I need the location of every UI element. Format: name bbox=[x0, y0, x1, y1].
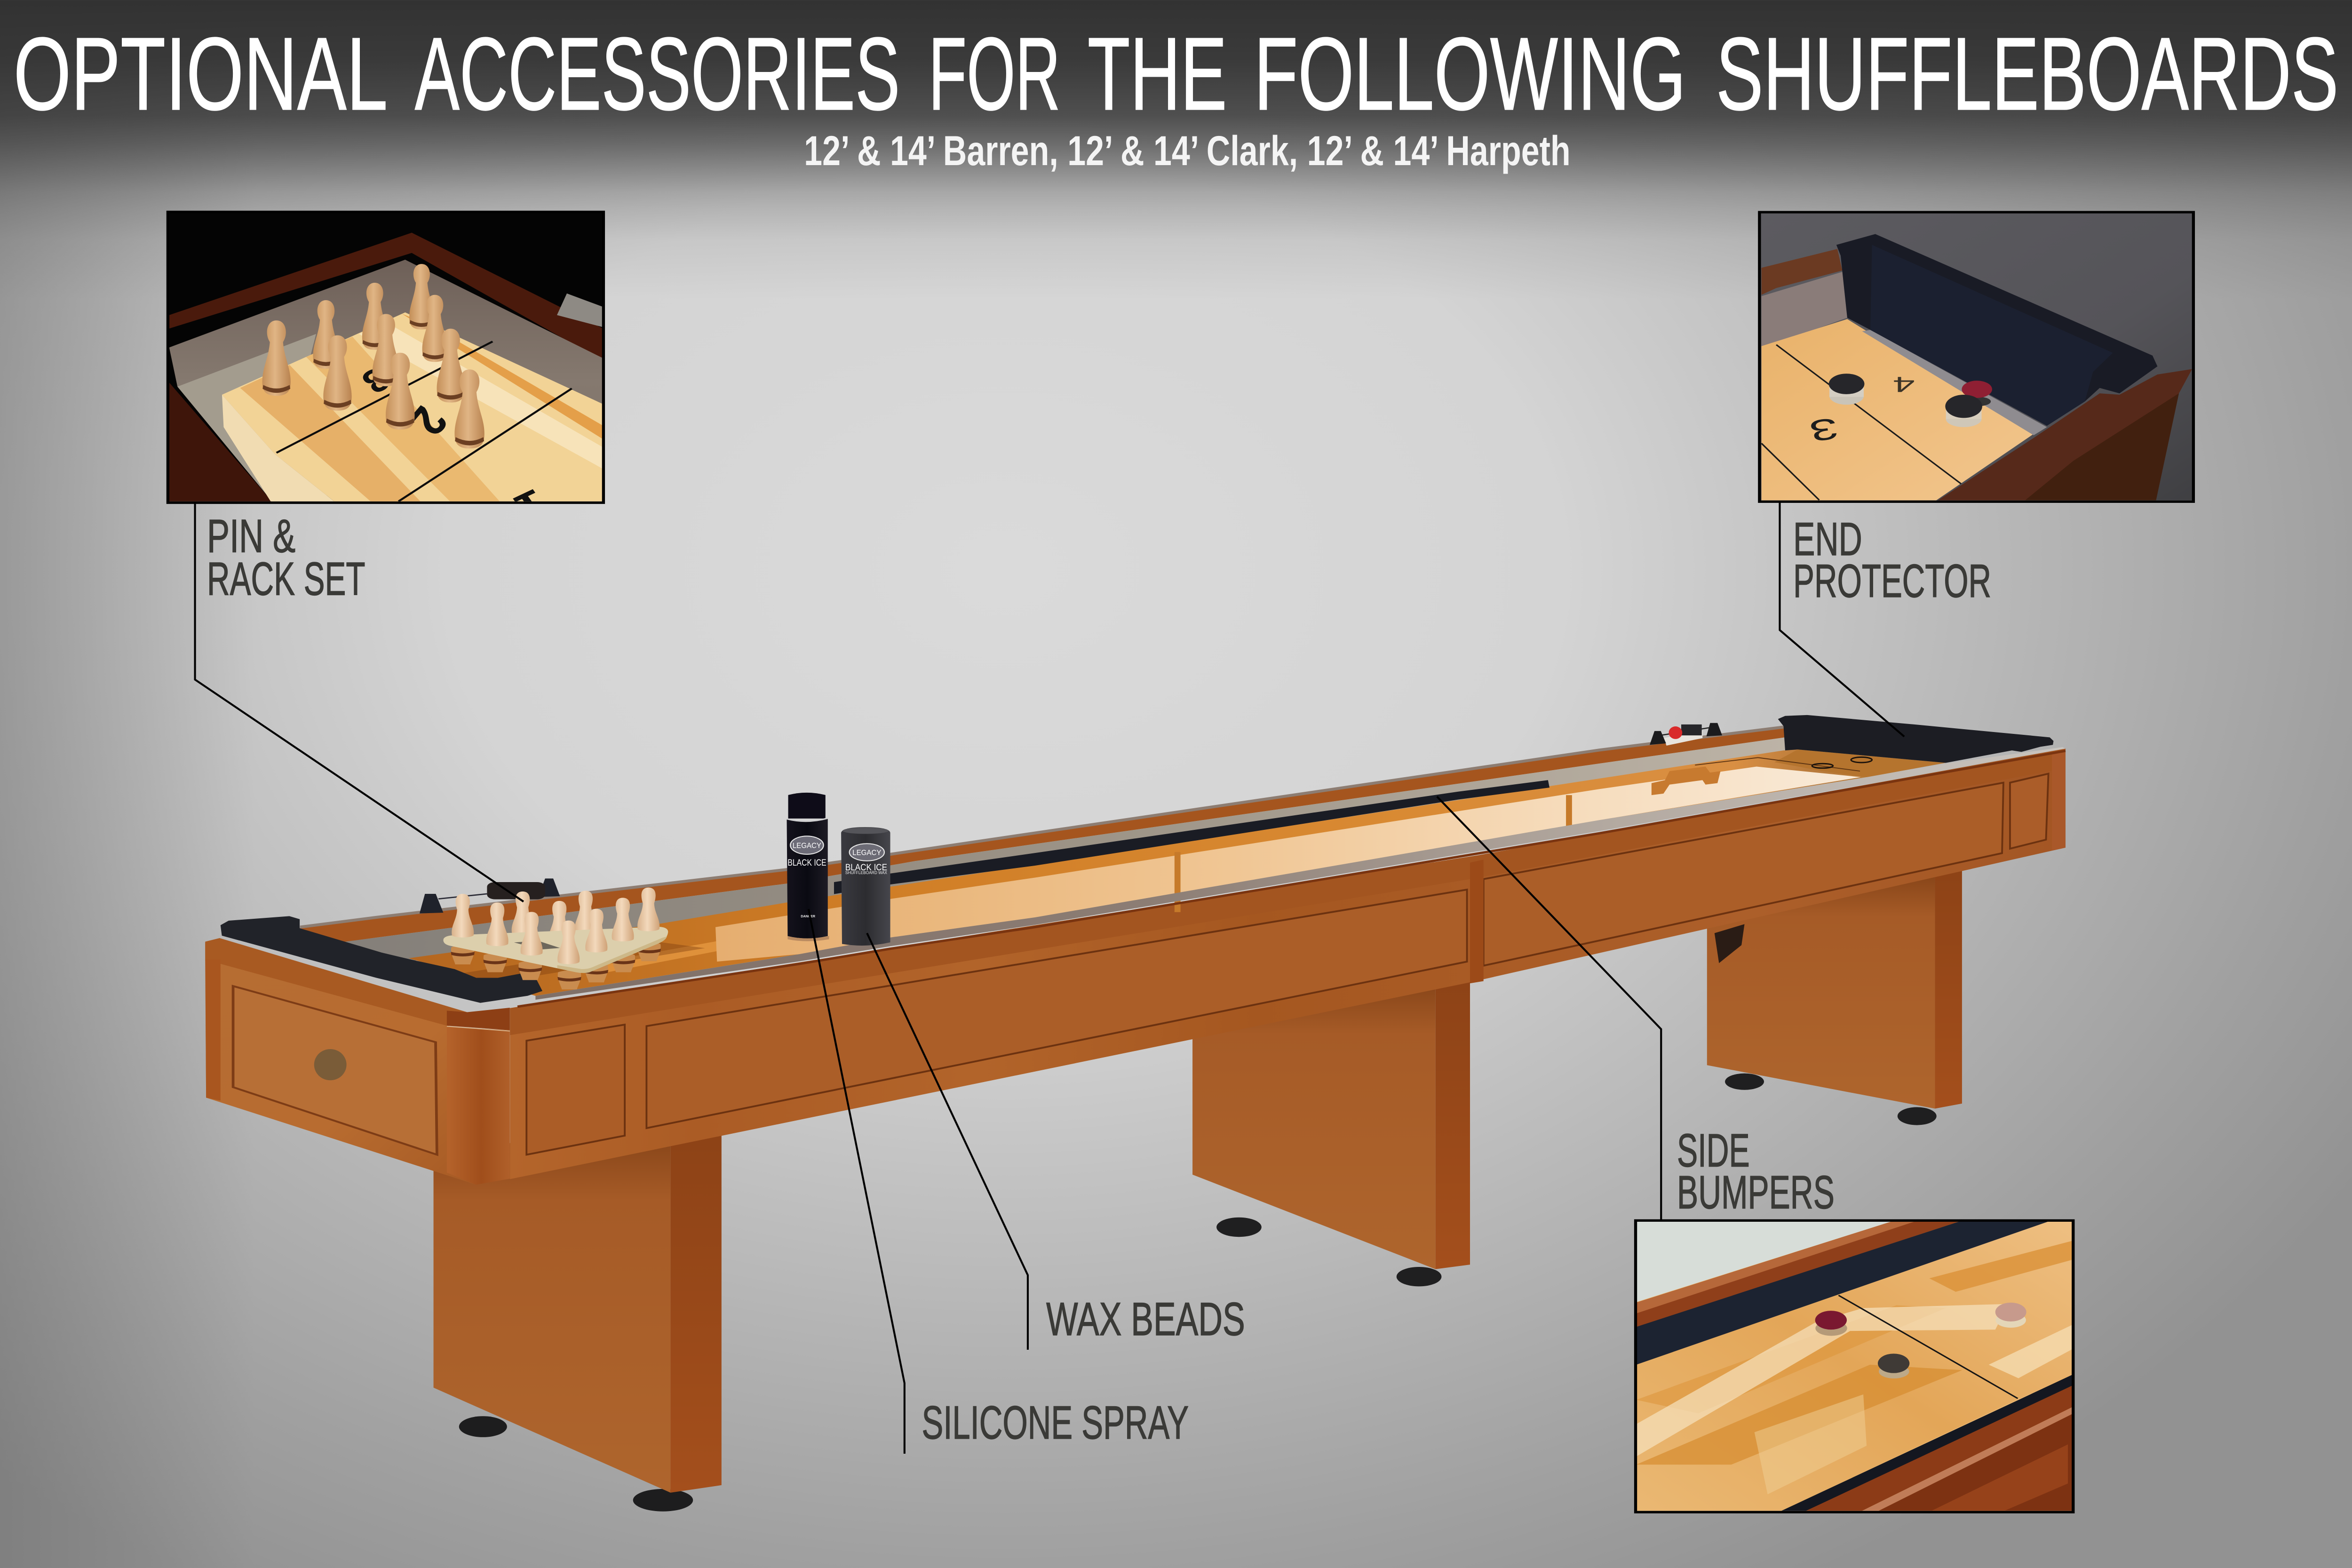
heading: title: THE bbox=[1088, 16, 1227, 132]
near leg bbox=[434, 1110, 722, 1512]
rack spring stand bbox=[420, 878, 560, 914]
middle leg bbox=[1192, 960, 1470, 1286]
pucks bbox=[1829, 374, 1992, 427]
carpet gutter bbox=[308, 737, 1785, 962]
score numbers: 3 bbox=[354, 360, 397, 400]
label: pin and rack set: PIN & bbox=[207, 510, 295, 562]
silicone spray can: DANGER bbox=[801, 914, 815, 918]
label: end protector: PROTECTOR bbox=[1793, 555, 1991, 607]
board top bbox=[222, 312, 603, 503]
wood rail bbox=[1762, 249, 1842, 295]
score numbers: 3 bbox=[1806, 411, 1842, 448]
photo inset: end protector: 4 bbox=[1893, 373, 1915, 396]
silicone spray can: BLACK ICE bbox=[787, 858, 826, 868]
wood strips bbox=[1636, 1305, 1946, 1413]
bowling pins bbox=[409, 264, 434, 329]
wax beads canister: LEGACY bbox=[852, 849, 881, 857]
front rim bbox=[535, 747, 2066, 1000]
wood surface bbox=[1636, 1221, 2074, 1512]
far rail bbox=[1636, 1221, 1961, 1328]
label: end protector bbox=[1793, 513, 1991, 607]
side panels bbox=[526, 773, 2049, 1154]
wood field bbox=[409, 749, 1946, 996]
carpet bbox=[1762, 272, 1847, 349]
pucks bbox=[1815, 1303, 2026, 1378]
pin reflections bbox=[451, 942, 661, 989]
rail bbox=[300, 727, 1785, 948]
leader line: wax beads bbox=[867, 933, 1028, 1350]
board side bbox=[222, 395, 336, 503]
photo inset: pin and rack set: 1 bbox=[506, 480, 557, 531]
chrome spring bbox=[557, 294, 603, 327]
label: wax beads: WAX BEADS bbox=[1046, 1293, 1245, 1345]
reflection bbox=[1636, 1304, 2009, 1457]
photo inset: pin and rack set bbox=[168, 211, 605, 531]
heading: title: FOR bbox=[929, 16, 1060, 132]
end face bbox=[205, 943, 476, 1185]
heading: title bbox=[14, 16, 2338, 132]
label: side bumpers bbox=[1677, 1124, 1835, 1218]
leader line: side bumpers bbox=[1437, 796, 1661, 1220]
playing surface bbox=[1762, 319, 2034, 501]
surface stripes bbox=[570, 927, 795, 975]
end panel bbox=[233, 986, 437, 1154]
far pin rack stand bbox=[1650, 723, 1722, 746]
table legs bbox=[434, 855, 1962, 1512]
playing surface bbox=[300, 725, 2066, 1007]
heading: title: FOLLOWING bbox=[1254, 16, 1686, 132]
rail bbox=[169, 233, 603, 361]
score lines bbox=[277, 342, 572, 501]
wax beads canister: SHUFFLEBOARD WAX bbox=[845, 871, 887, 876]
leader line: silicone spray bbox=[809, 909, 905, 1454]
reflected far rack bbox=[1652, 767, 1721, 795]
label: silicone spray: SILICONE SPRAY bbox=[922, 1397, 1189, 1449]
end rail bbox=[1936, 369, 2192, 501]
side bumper bbox=[834, 780, 1549, 894]
long side of table bbox=[510, 748, 2066, 1179]
label: pin and rack set bbox=[207, 510, 365, 605]
wax beads canister: BLACK ICE bbox=[845, 862, 887, 872]
corner post bbox=[447, 1026, 510, 1185]
carpet bbox=[169, 260, 603, 503]
photo inset: end protector bbox=[1759, 212, 2194, 501]
rack board bbox=[443, 927, 668, 973]
far end protector bbox=[1778, 715, 2053, 763]
near pin rack set bbox=[420, 878, 668, 989]
near bumper bbox=[1779, 1374, 2074, 1512]
silicone spray can bbox=[787, 793, 829, 941]
far bumper bbox=[1636, 1221, 2050, 1365]
heading: title: ACCESSORIES bbox=[415, 16, 900, 132]
reflection of wall bbox=[715, 767, 1861, 962]
label: side bumpers: BUMPERS bbox=[1677, 1167, 1835, 1218]
label: pin and rack set: RACK SET bbox=[207, 553, 365, 605]
far leg bbox=[1707, 855, 1962, 1125]
brass plaque bbox=[314, 1049, 347, 1080]
front pins bbox=[452, 888, 660, 964]
far end scoring zone bbox=[1774, 749, 1946, 777]
wall bbox=[1636, 1221, 1893, 1302]
subheading: compatible models: 12’ & 14’ Barren, 12’ & 14’ Clark, 12’ & 14’ Harpeth bbox=[804, 127, 1571, 174]
leader line: pin and rack set bbox=[195, 502, 524, 902]
label: end protector: END bbox=[1793, 513, 1862, 565]
label: side bumpers: SIDE bbox=[1677, 1124, 1750, 1176]
near end protector bbox=[221, 916, 542, 1003]
black protector bbox=[1836, 234, 2157, 426]
near end of table bbox=[205, 938, 510, 1185]
score lines bbox=[1762, 345, 1961, 500]
wax beads canister bbox=[841, 827, 890, 946]
photo inset: pin and rack set: 2 bbox=[397, 399, 459, 443]
near rail bbox=[1804, 1385, 2074, 1512]
shuffleboard table bbox=[205, 715, 2066, 1512]
leader line: end protector bbox=[1780, 502, 1904, 737]
back pins bbox=[512, 891, 596, 945]
heading: title: OPTIONAL bbox=[14, 16, 388, 132]
photo inset: side bumpers bbox=[1636, 1220, 2074, 1512]
carpet strip bbox=[1862, 330, 2047, 435]
score line bbox=[1838, 1295, 2018, 1399]
silicone spray can: LEGACY bbox=[793, 842, 821, 850]
seam post bbox=[1470, 860, 1484, 983]
